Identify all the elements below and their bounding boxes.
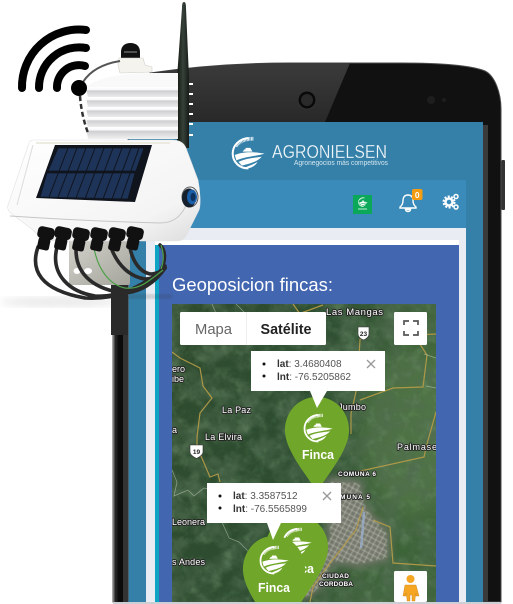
notification badge: [412, 189, 422, 200]
info popup 2: [207, 483, 341, 540]
marker: upper farm: [285, 397, 349, 492]
screen: [129, 122, 483, 604]
map place labels: CORDOBA: [319, 581, 353, 588]
info popup 1: lnt: -76.5205862: [277, 372, 351, 383]
cables: [35, 245, 165, 298]
highway shield 19: 19: [193, 449, 200, 456]
marker: front farm: [243, 536, 305, 604]
screen background: [129, 122, 483, 602]
phone bottom edge: [113, 602, 501, 604]
farm avatar: [353, 195, 372, 214]
urban area: [300, 477, 390, 602]
navigation bar: [129, 180, 466, 228]
sensor cable: [83, 61, 120, 82]
map place labels: La Paz: [222, 405, 252, 415]
map place labels: La Elvira: [205, 432, 242, 442]
ground shadow: [0, 297, 120, 307]
map place labels: MUNA 5: [340, 494, 370, 501]
logo emblem: [233, 138, 265, 169]
content background: [129, 228, 466, 602]
radiation shield: [86, 73, 178, 139]
white card: [155, 240, 459, 602]
phone body: [113, 63, 501, 602]
logo: [233, 138, 388, 169]
map place labels: [172, 307, 437, 588]
info popup 1: [251, 351, 385, 408]
left edge strips: [113, 296, 129, 602]
glossy reflection: [128, 63, 350, 140]
marker: back farm: Finca: [282, 561, 315, 576]
map place labels: a: [172, 425, 177, 435]
roads: [172, 304, 436, 602]
antenna: [177, 2, 189, 148]
info popup 2: lat: 3.3587512: [233, 491, 298, 502]
fullscreen button: [394, 312, 427, 345]
notification badge: 0: [415, 190, 420, 200]
map place labels: Jumbo: [338, 402, 366, 412]
map type control: [180, 312, 326, 345]
settings gears icon: [444, 194, 458, 209]
icon: wifi signal: [22, 30, 87, 96]
map place labels: ero: [172, 364, 185, 374]
weather station: [8, 2, 200, 335]
info popup 2: lnt: -76.5565899: [233, 504, 307, 515]
panel heading: Geoposicion fincas:: [172, 275, 333, 295]
sensor dome: [118, 43, 152, 73]
side button: [502, 160, 505, 210]
map place labels: Las Mangas: [326, 307, 383, 318]
phone: [113, 63, 505, 604]
highway shield 23: [358, 327, 369, 340]
map type control: Satélite: [260, 321, 312, 338]
satellite terrain: [172, 304, 436, 602]
map place labels: s Andes: [172, 557, 206, 567]
front sensors: [427, 96, 446, 104]
marker: back farm: [268, 523, 328, 602]
blue panel: [159, 245, 459, 602]
cable glands: [34, 225, 145, 253]
striped cable: [80, 96, 88, 133]
map place labels: Palmase: [397, 442, 437, 452]
highway shield 23: 23: [360, 331, 367, 338]
mounting plate: [69, 240, 130, 285]
map place labels: CIUDAD: [322, 573, 349, 580]
street view button: [394, 571, 427, 602]
logo wordmark: AGRONIELSEN: [272, 142, 387, 162]
highway shield 19: [190, 445, 203, 458]
marker: upper farm: Finca: [302, 447, 335, 462]
logo tagline: Agronegocios más competitivos: [294, 160, 388, 167]
map place labels: Leonera: [172, 517, 205, 527]
antenna ticks: [189, 83, 193, 136]
mounting pole: [111, 285, 128, 335]
map type control: Mapa: [195, 321, 233, 338]
map place labels: COMUNA 6: [338, 471, 376, 478]
side connector: [182, 187, 198, 208]
info popup 1: lat: 3.4680408: [277, 359, 342, 370]
boundary lines: [172, 304, 436, 556]
marker: front farm: Finca: [258, 580, 291, 595]
earpiece speaker: [298, 91, 316, 109]
enclosure: [8, 140, 200, 241]
solar panel: [36, 145, 152, 202]
shadow across phone: [128, 294, 172, 299]
bell icon: [400, 195, 416, 212]
map place labels: ibe: [172, 374, 184, 384]
right bezel strip: [483, 125, 488, 602]
green wire: [94, 245, 163, 288]
map: [172, 304, 436, 602]
